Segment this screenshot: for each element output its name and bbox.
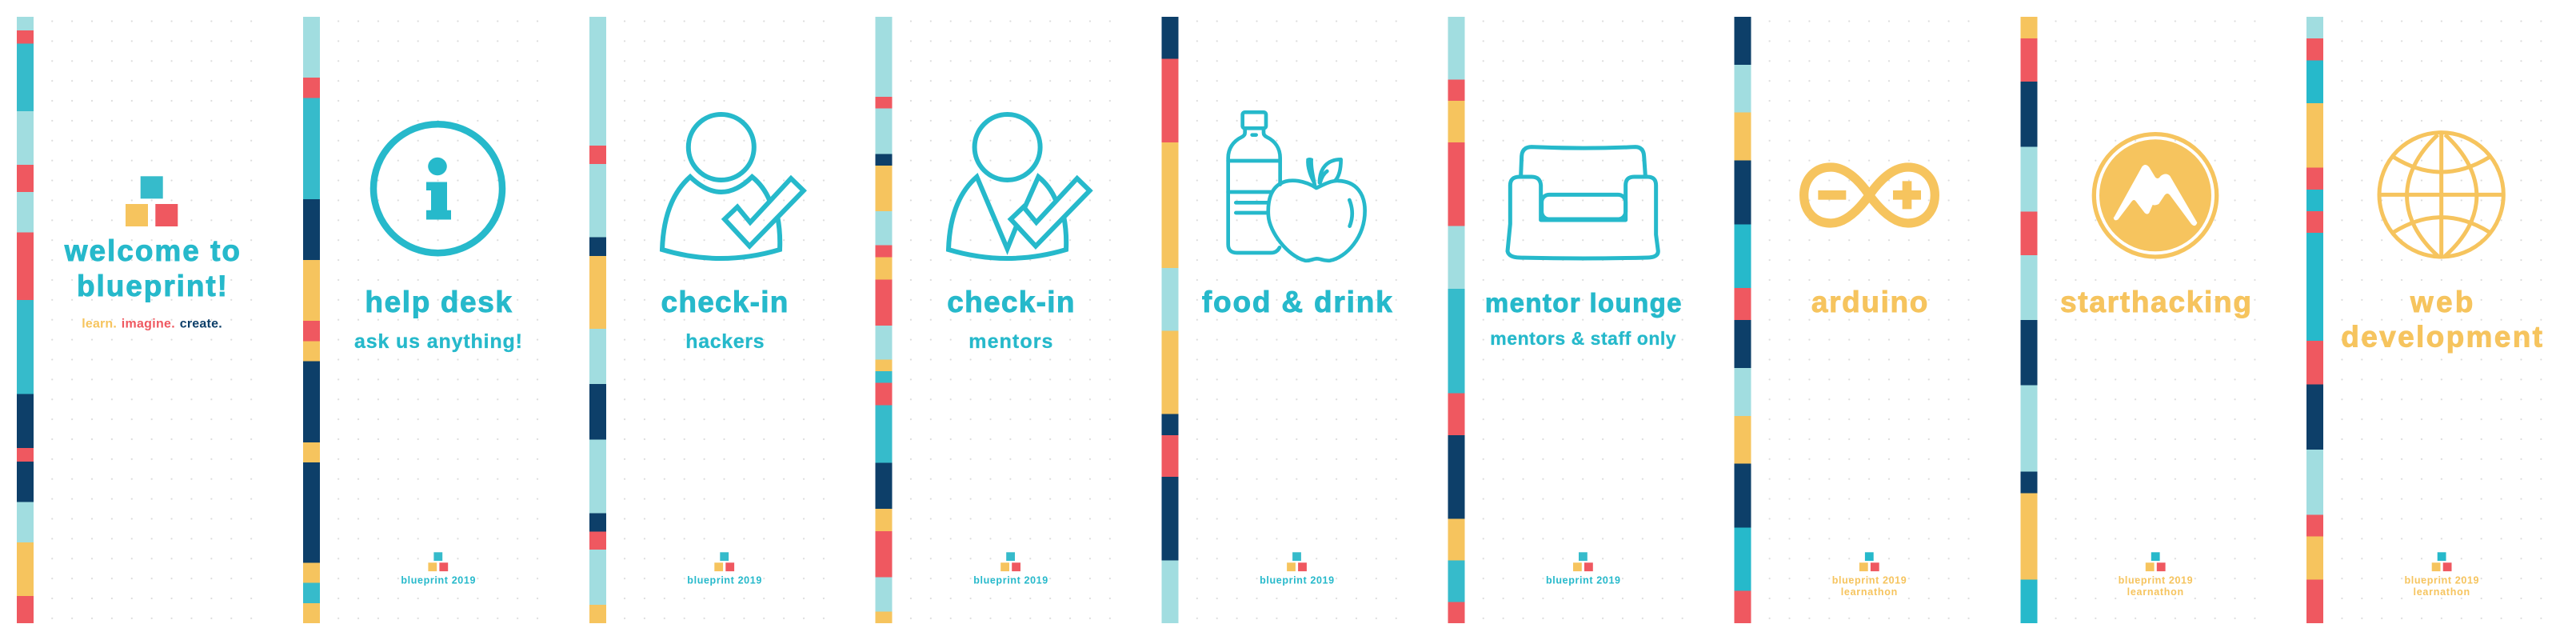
footer logo: blueprint 2019 [973,574,1048,586]
colour strip [876,17,893,623]
footer logo [687,552,761,586]
colour strip [1734,17,1751,623]
panel: starthacking [2020,11,2265,628]
subheading: mentors [968,330,1052,353]
footer logo [973,552,1048,586]
footer logo: learnathon [1841,586,1897,598]
panel: web development [2306,11,2551,628]
colour strip [589,17,606,623]
colour strip [2020,17,2037,623]
colour strip [2306,17,2323,623]
subheading: hackers [685,330,765,353]
icon: person with check mark [662,114,804,258]
footer logo: blueprint 2019 [1546,574,1620,586]
heading: food & drink [1202,286,1392,318]
icon: globe [2379,133,2503,258]
heading: help desk [365,286,512,318]
colour strip [1448,17,1465,623]
panel: arduino [1734,11,1979,628]
icon: water bottle and apple [1228,112,1365,261]
icon: information circle [373,124,502,253]
heading [2341,286,2542,354]
icon: blueprint blocks logo [126,176,178,226]
heading: welcome to blueprint: welcome to [64,234,240,267]
heading: web [2410,286,2473,318]
footer logo [2119,552,2193,598]
footer logo [401,552,475,586]
footer logo: learnathon [2413,586,2470,598]
footer logo: blueprint 2019 [2404,574,2479,586]
heading: check-in [661,286,788,318]
footer logo [2404,552,2479,598]
colour strip [17,17,34,623]
footer logo: blueprint 2019 [1832,574,1907,586]
heading: check-in [947,286,1075,318]
panel: help desk [303,11,547,628]
footer logo: blueprint 2019 [1260,574,1334,586]
tagline: imagine. [122,317,175,330]
colour strip [1162,17,1179,623]
footer logo: learnathon [2127,586,2183,598]
footer logo: blueprint 2019 [687,574,761,586]
footer logo [1260,552,1334,586]
panel: welcome [17,11,262,628]
colour strip [303,17,320,623]
heading: starthacking [2060,286,2251,318]
panel: mentor lounge [1448,11,1692,628]
subheading: ask us anything! [354,330,522,353]
footer logo: blueprint 2019 [401,574,475,586]
icon: mountain badge [2094,134,2217,257]
heading: welcome to blueprint [64,234,240,302]
icon: sofa [1508,147,1658,258]
footer logo: blueprint 2019 [2119,574,2193,586]
subheading: mentors & staff only [1490,328,1676,349]
panel: check-in hackers [589,11,833,628]
footer logo [1832,552,1907,598]
panel: food and drink [1162,11,1406,628]
heading: development [2341,321,2542,354]
icon: mentor with check mark [949,114,1089,258]
heading: mentor lounge [1485,288,1681,318]
footer logo [1546,552,1620,586]
tagline [82,317,222,330]
panel: check-in mentors [876,11,1120,628]
tagline: learn. [82,317,117,330]
tagline: create. [180,317,222,330]
heading: arduino [1811,286,1927,318]
icon: arduino infinity [1804,167,1935,223]
heading: welcome to blueprint: blueprint! [77,270,227,302]
